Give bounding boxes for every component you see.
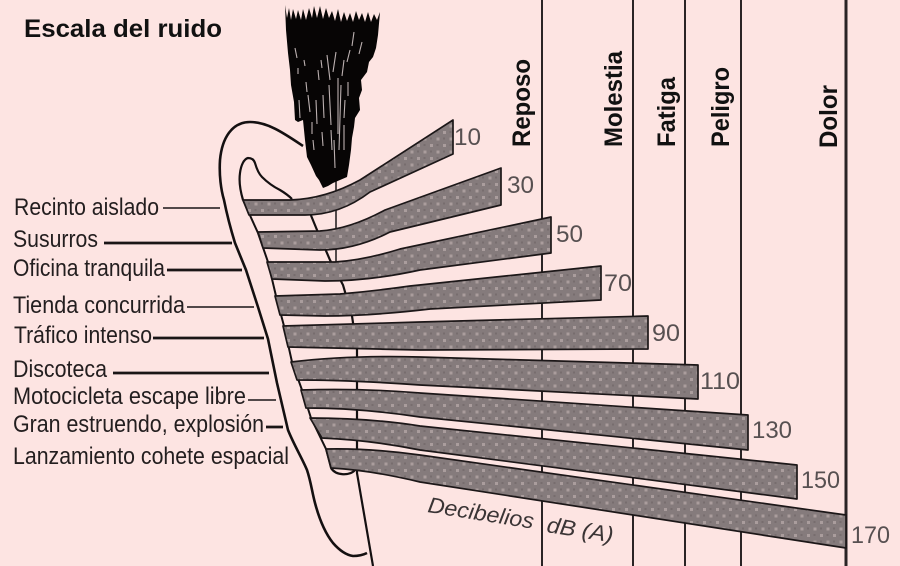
noise source labels: Motocicleta escape libre: [13, 383, 246, 410]
noise source labels: Tienda concurrida: [13, 292, 186, 319]
bar: 70 dB: [275, 266, 601, 316]
decibel values: [454, 124, 890, 549]
bar: 90 dB: [283, 316, 648, 350]
threshold headings: Dolor: [815, 85, 843, 148]
bar: 50 dB: [267, 217, 551, 281]
noise source labels: Recinto aislado: [14, 194, 159, 221]
threshold headings: Reposo: [508, 59, 536, 147]
threshold headings: Fatiga: [653, 76, 681, 147]
noise source labels: Lanzamiento cohete espacial: [13, 443, 289, 470]
decibel values: 50: [556, 221, 583, 248]
axis label: decibels: Decibelios: [426, 492, 536, 534]
threshold headings: Peligro: [707, 67, 735, 147]
threshold headings: Molestia: [600, 50, 628, 147]
threshold lines: [336, 0, 846, 566]
icon: hair tuft: [285, 5, 380, 188]
decibel values: 30: [507, 172, 534, 199]
bar: 150 dB: [310, 418, 797, 499]
title: Escala del ruido: [24, 15, 222, 43]
noise source labels: [13, 194, 289, 470]
decibel values: 170: [851, 522, 890, 549]
noise source labels: Discoteca: [13, 356, 108, 383]
axis label: decibels: [426, 492, 615, 547]
decibel values: 10: [454, 124, 481, 151]
decibel values: 70: [604, 270, 632, 297]
decibel values: 90: [652, 320, 680, 347]
label leader lines: [104, 208, 283, 427]
decibel values: 130: [752, 417, 792, 444]
noise source labels: Gran estruendo, explosión: [13, 411, 264, 438]
icon: ear: [220, 122, 373, 566]
bar: 30 dB: [258, 168, 501, 250]
threshold headings: [508, 50, 843, 148]
decibel values: 110: [700, 368, 740, 395]
noise source labels: Tráfico intenso: [14, 322, 152, 349]
bar: 170 dB: [326, 449, 846, 548]
bar: 10 dB: [243, 120, 453, 215]
noise source labels: Susurros: [13, 226, 98, 253]
axis label: decibels: dB (A): [545, 512, 615, 547]
bar: 130 dB: [301, 389, 748, 450]
noise source labels: Oficina tranquila: [13, 255, 166, 282]
decibel values: 150: [801, 467, 840, 494]
bar: 110 dB: [291, 357, 698, 399]
